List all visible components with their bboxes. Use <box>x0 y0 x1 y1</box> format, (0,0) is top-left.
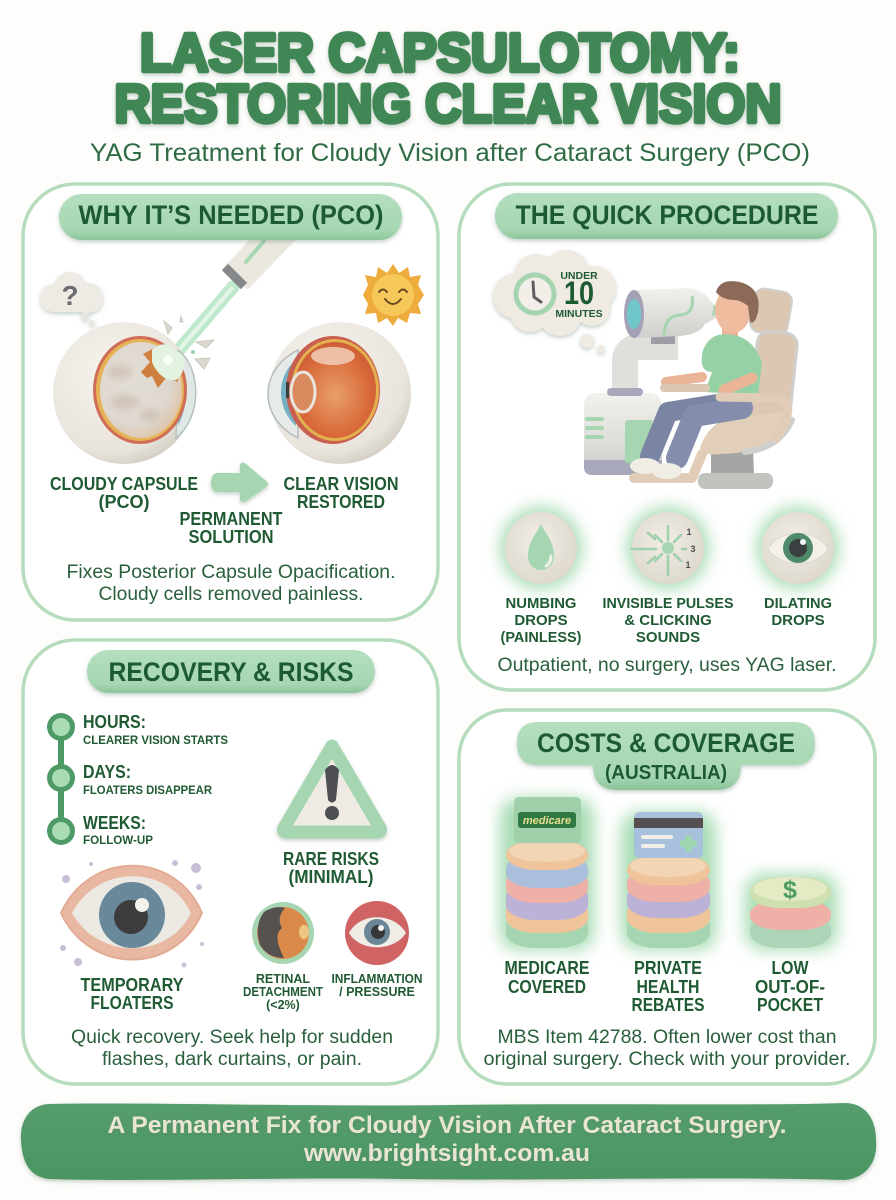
coin stack: low out of pocket <box>745 874 837 950</box>
label: invisible pulses <box>602 595 734 646</box>
dollar sign: $ <box>783 876 797 904</box>
heading: the quick procedure <box>495 193 838 239</box>
label: inflammation: INFLAMMATION <box>332 972 422 986</box>
icon: dilating eye <box>757 507 839 589</box>
medicare card <box>514 797 581 843</box>
label: invisible pulses: SOUNDS <box>636 629 700 646</box>
label: clear vision: CLEAR VISION <box>284 474 398 494</box>
label: dilating drops: DILATING <box>764 595 832 612</box>
panel: costs and coverage <box>459 710 875 1084</box>
label: retinal detachment: DETACHMENT <box>243 985 323 999</box>
timeline: DAYS: <box>83 762 131 782</box>
thought cloud: under 10 minutes <box>493 250 616 353</box>
label: private health rebates: HEALTH <box>636 977 700 997</box>
label: numbing drops: NUMBING <box>506 595 576 612</box>
icon: inflamed eye <box>345 901 409 965</box>
icon: retinal detachment <box>252 902 314 964</box>
label: permanent solution: SOLUTION <box>188 527 274 547</box>
panel: the quick procedure <box>459 184 875 690</box>
label: inflammation: / PRESSURE <box>339 985 415 999</box>
icon: laser pulses: 1 <box>685 560 691 570</box>
title <box>114 23 782 134</box>
arrow <box>211 463 268 502</box>
timeline: WEEKS: <box>83 813 146 833</box>
icon: numbing drop <box>500 507 582 589</box>
label: rare risks: (MINIMAL) <box>288 867 374 887</box>
heading: costs and coverage: COSTS & COVERAGE <box>537 728 795 758</box>
label: dilating drops: DROPS <box>771 612 825 629</box>
label: numbing drops <box>500 595 582 646</box>
coin stack: private health <box>621 812 716 950</box>
machine base <box>584 393 662 475</box>
icon: question cloud: ? <box>61 280 79 311</box>
icon: warning triangle <box>283 746 381 832</box>
subtitle: YAG Treatment for Cloudy Vision after Cataract Surgery (PCO) <box>90 139 810 167</box>
label: private health rebates: PRIVATE <box>634 958 702 978</box>
icon: floaters eye <box>60 860 204 968</box>
panel: why it's needed <box>23 184 438 620</box>
body text: Cloudy cells removed painless. <box>98 584 364 605</box>
label: low out of pocket <box>755 958 825 1015</box>
medicare card: medicare <box>523 815 571 827</box>
heading: recovery and risks: RECOVERY & RISKS <box>108 657 354 687</box>
title: RESTORING CLEAR VISION <box>114 74 782 134</box>
body text: flashes, dark curtains, or pain. <box>102 1049 362 1070</box>
body text <box>71 1027 393 1070</box>
label: private health rebates <box>632 958 704 1015</box>
label: low out of pocket: LOW <box>772 958 808 978</box>
panel: recovery and risks <box>23 640 438 1084</box>
illustration: patient at YAG laser machine <box>584 281 798 489</box>
heading: why it's needed <box>59 194 402 240</box>
heading: the quick procedure: THE QUICK PROCEDURE <box>516 200 818 230</box>
label: invisible pulses: INVISIBLE PULSES <box>602 595 734 612</box>
body text: original surgery. Check with your provider. <box>484 1049 850 1070</box>
label: permanent solution <box>180 509 282 547</box>
heading: why it's needed: WHY IT’S NEEDED (PCO) <box>78 200 384 230</box>
thought cloud: under 10 minutes: UNDER <box>560 270 598 282</box>
icon: cloudy eye <box>53 316 214 464</box>
laser head <box>624 288 722 338</box>
coin stack: medicare <box>500 797 594 950</box>
timeline <box>47 712 228 847</box>
label: retinal detachment: (<2%) <box>266 998 300 1012</box>
label: temporary floaters <box>80 975 184 1013</box>
label: numbing drops: (PAINLESS) <box>500 629 582 646</box>
footer text <box>108 1112 787 1167</box>
title: LASER CAPSULOTOMY: <box>140 23 740 83</box>
label: rare risks: RARE RISKS <box>283 849 379 869</box>
body text: MBS Item 42788. Often lower cost than <box>498 1027 836 1048</box>
label: medicare covered: MEDICARE <box>504 958 590 978</box>
health card <box>634 812 703 858</box>
heading: recovery and risks <box>87 650 375 693</box>
timeline: HOURS: <box>83 712 146 732</box>
timeline: CLEARER VISION STARTS <box>83 735 228 747</box>
label: low out of pocket: OUT-OF- <box>755 977 825 997</box>
icon: smiling sun <box>363 264 424 326</box>
label: inflammation <box>332 972 422 999</box>
machine arm <box>625 347 678 390</box>
icon: laser pulses: 1 <box>686 527 692 537</box>
person <box>630 281 788 479</box>
label: rare risks <box>283 849 379 887</box>
thought cloud: under 10 minutes: 10 <box>564 275 594 311</box>
footer text: A Permanent Fix for Cloudy Vision After Cataract Surgery. <box>108 1112 787 1139</box>
body text <box>66 562 396 605</box>
label: cloudy capsule: (PCO) <box>98 492 150 512</box>
label: cloudy capsule <box>50 474 198 512</box>
thought cloud: under 10 minutes: MINUTES <box>555 308 603 320</box>
icon: clear eye <box>268 322 411 464</box>
label: cloudy capsule: CLOUDY CAPSULE <box>50 474 198 494</box>
body text: Outpatient, no surgery, uses YAG laser. <box>498 655 836 676</box>
label: invisible pulses: & CLICKING <box>624 612 712 629</box>
label: medicare covered: COVERED <box>508 977 586 997</box>
icon: laser pulses <box>627 507 709 589</box>
label: retinal detachment: RETINAL <box>256 972 310 986</box>
chair <box>634 287 798 489</box>
heading: costs and coverage <box>517 722 815 790</box>
heading: costs and coverage: (AUSTRALIA) <box>605 762 727 784</box>
label: clear vision: RESTORED <box>297 492 385 512</box>
label: low out of pocket: POCKET <box>757 995 823 1015</box>
footer text: www.brightsight.com.au <box>303 1140 590 1167</box>
body text: Quick recovery. Seek help for sudden <box>71 1027 393 1048</box>
icon: laser pulses: 3 <box>690 544 696 554</box>
body text <box>484 1027 850 1070</box>
body text: Fixes Posterior Capsule Opacification. <box>66 562 396 583</box>
label: private health rebates: REBATES <box>632 995 704 1015</box>
label: retinal detachment <box>243 972 323 1012</box>
label: numbing drops: DROPS <box>514 612 568 629</box>
label: permanent solution: PERMANENT <box>180 509 282 529</box>
label: medicare covered <box>504 958 590 997</box>
label: clear vision <box>284 474 398 512</box>
laser handpiece <box>172 222 290 358</box>
label: temporary floaters: TEMPORARY <box>80 975 184 995</box>
timeline: FOLLOW-UP <box>83 835 153 847</box>
label: temporary floaters: FLOATERS <box>90 993 174 1013</box>
footer banner <box>21 1103 876 1180</box>
label: dilating drops <box>764 595 832 629</box>
icon: question cloud <box>40 272 103 326</box>
timeline: FLOATERS DISAPPEAR <box>83 785 213 797</box>
